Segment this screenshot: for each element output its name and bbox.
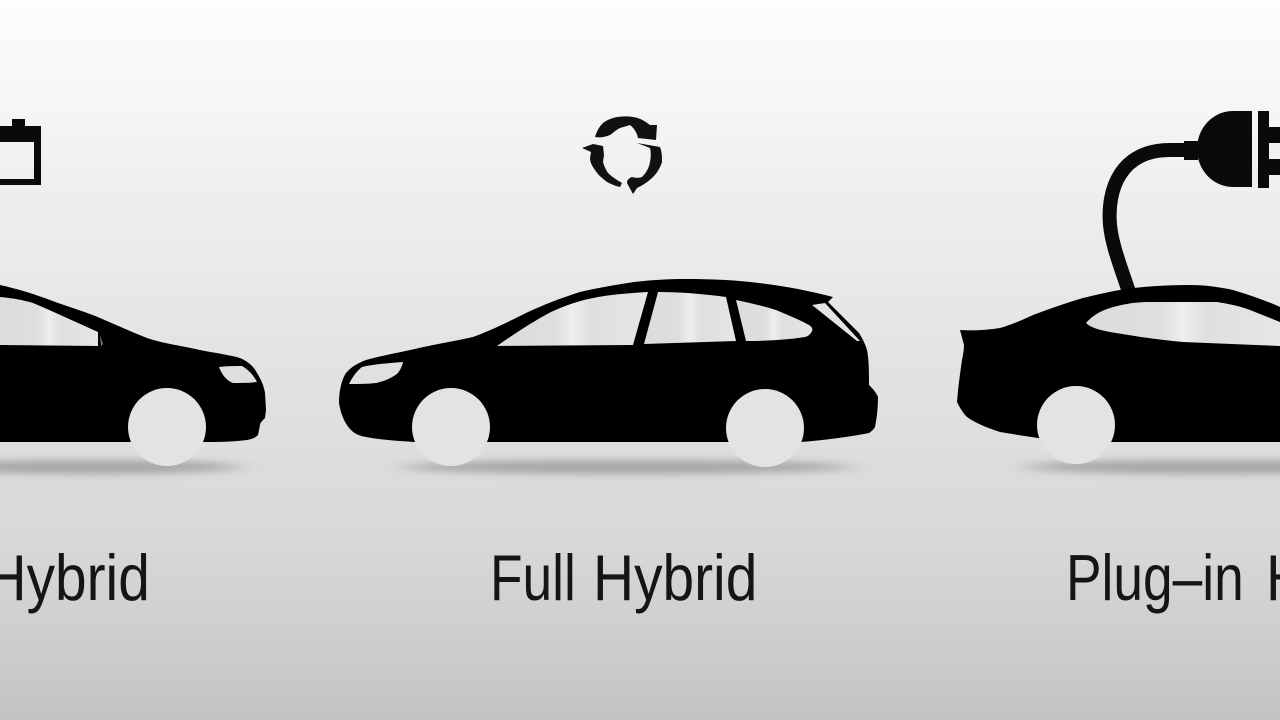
body [957, 285, 1280, 442]
body [0, 285, 266, 442]
label: full hybrid: Hybrid [593, 541, 757, 614]
label: full hybrid [490, 541, 757, 614]
rear wheel [1037, 386, 1115, 464]
rear strip window [812, 303, 860, 341]
left car: sedan silhouette [0, 285, 266, 466]
label: full hybrid: Full [490, 541, 576, 614]
top arrow [595, 116, 657, 140]
headlight [219, 366, 257, 383]
side window [0, 297, 98, 346]
pillar sliver [100, 335, 103, 346]
right car: plug-in silhouette [957, 285, 1280, 464]
right arrow [627, 143, 662, 194]
recycling arrows icon [582, 116, 662, 194]
plug and cord icon [1110, 111, 1280, 292]
rear wheel [726, 389, 804, 467]
headlight [349, 362, 403, 384]
left arrow [582, 144, 622, 187]
plug collar [1184, 141, 1198, 160]
centre car: hatchback silhouette [339, 279, 878, 467]
shadow: centre car [402, 460, 852, 474]
label: plug-in hybrid: Plug–in [1066, 541, 1244, 614]
shadow: left car [0, 460, 240, 474]
body [339, 279, 878, 442]
window [1086, 302, 1280, 346]
rear window [736, 300, 812, 341]
front wheel [412, 388, 490, 466]
shadow: right car [1025, 460, 1280, 474]
front wheel [128, 388, 206, 466]
front window [497, 292, 648, 346]
middle window [644, 292, 736, 344]
battery icon [0, 119, 41, 185]
plug prongs [1269, 127, 1280, 175]
plug plate [1258, 111, 1269, 188]
plug head [1197, 111, 1252, 187]
cord [1110, 150, 1190, 292]
